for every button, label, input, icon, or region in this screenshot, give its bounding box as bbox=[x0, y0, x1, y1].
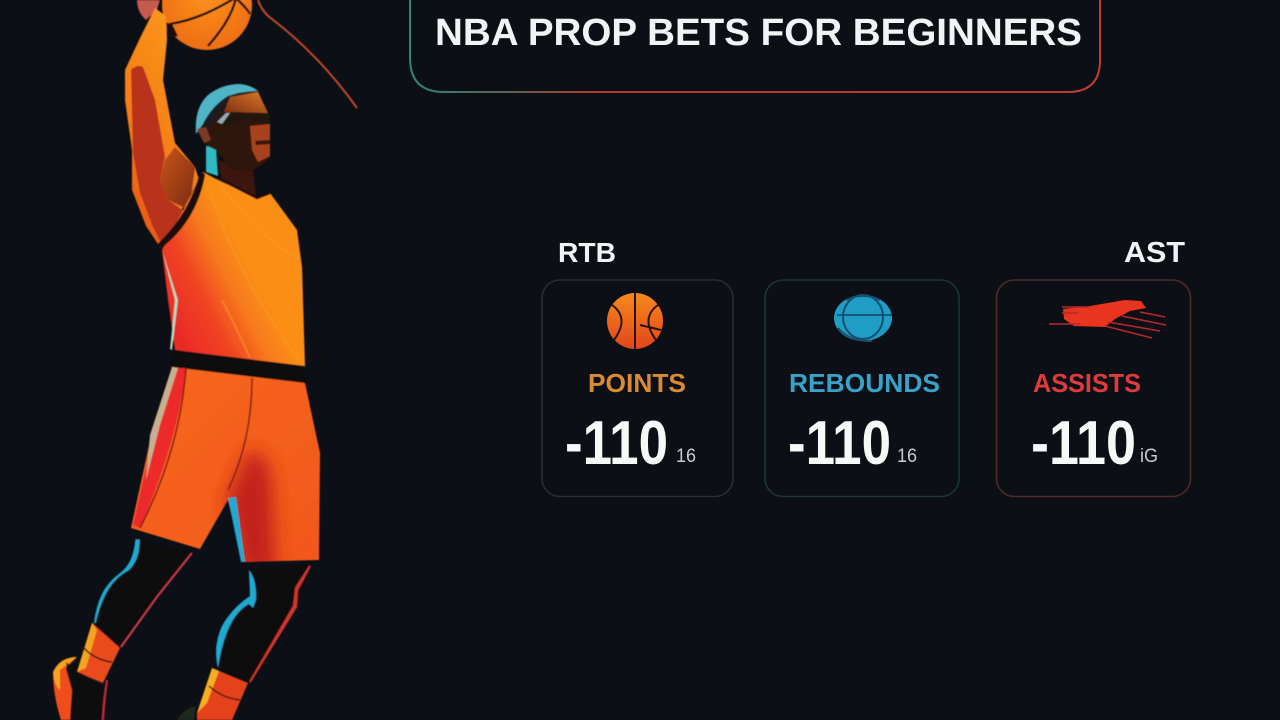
points label: POINTS bbox=[588, 368, 686, 398]
title box bbox=[410, 0, 1100, 92]
shorts inner shadow bbox=[226, 450, 276, 575]
panel: points bbox=[542, 280, 733, 496]
jersey bbox=[162, 172, 305, 367]
rebounds label: REBOUNDS bbox=[789, 368, 940, 398]
neck cyan stripe bbox=[206, 146, 218, 176]
shorts seams bbox=[140, 368, 252, 528]
hand bbox=[137, 0, 160, 20]
backboard net line bbox=[258, 0, 357, 108]
jersey folds bbox=[206, 183, 300, 358]
right leg bbox=[215, 565, 310, 682]
rebounds odds: -110 bbox=[788, 409, 891, 478]
raised arm bbox=[125, 8, 199, 247]
right sock bbox=[197, 668, 248, 720]
basketball bbox=[162, 0, 252, 50]
illustration: basketball player bbox=[53, 0, 357, 720]
points odds: -110 bbox=[565, 409, 668, 478]
icon: basketball bbox=[607, 293, 663, 349]
label: RTB: RTB bbox=[558, 237, 616, 268]
rebounds small note: 16 bbox=[897, 446, 917, 467]
left leg bbox=[92, 540, 192, 648]
arm shadow bbox=[131, 66, 187, 245]
waistband bbox=[171, 350, 305, 385]
points small note: 16 bbox=[676, 446, 696, 467]
shoulder shadow bbox=[160, 147, 195, 209]
left leg cyan outline bbox=[95, 540, 139, 623]
calf cyan strip bbox=[228, 497, 245, 562]
head bbox=[196, 84, 270, 172]
assists label: ASSISTS bbox=[1033, 368, 1141, 398]
panel: assists bbox=[996, 280, 1190, 496]
label: AST: AST bbox=[1124, 237, 1185, 269]
neck bbox=[218, 160, 256, 197]
icon: swoosh bbox=[1049, 300, 1166, 338]
icon: globe bbox=[834, 295, 892, 341]
assists odds: -110 bbox=[1031, 409, 1136, 478]
shorts red panel bbox=[133, 368, 186, 528]
right leg cyan outline bbox=[216, 570, 256, 668]
collar trim bbox=[218, 178, 270, 198]
title: NBA PROP BETS FOR BEGINNERS bbox=[435, 12, 1082, 54]
panel: rebounds bbox=[765, 280, 959, 496]
left sock bbox=[77, 623, 120, 683]
left shoe bbox=[53, 657, 77, 720]
right shoe bbox=[177, 706, 196, 720]
assists small note: iG bbox=[1140, 446, 1158, 467]
jersey cyan edge bbox=[162, 250, 178, 350]
left leg red outline bbox=[121, 553, 192, 647]
right leg red outline bbox=[250, 566, 310, 682]
jersey armhole trim bbox=[158, 172, 204, 248]
shorts bbox=[131, 367, 320, 562]
